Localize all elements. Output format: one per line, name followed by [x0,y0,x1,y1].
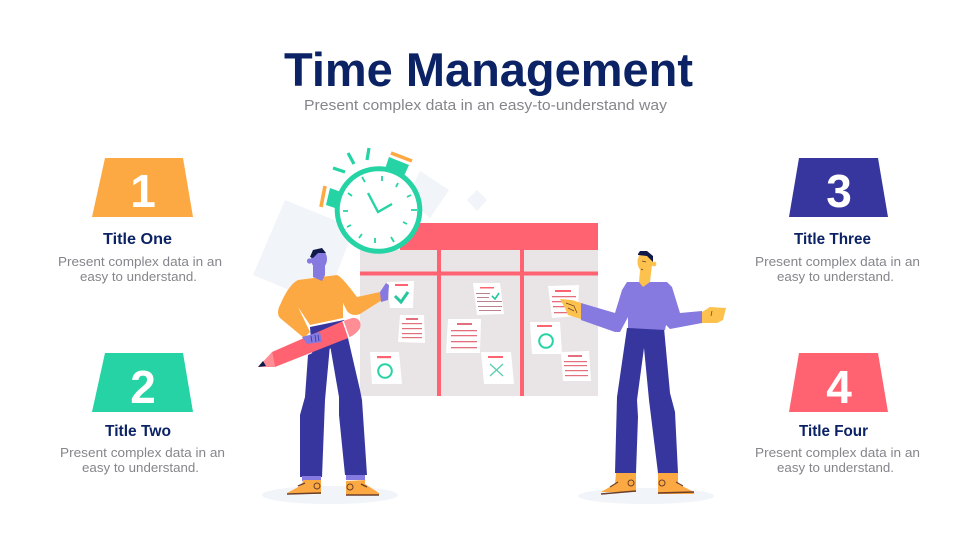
panel: item 3 [755,158,920,284]
illustration: person with pencil [258,248,398,504]
title: Time Management [284,43,693,96]
illustration: background shapes [253,171,487,305]
note: lines right [561,351,591,381]
badge 1 [92,158,193,217]
text: description 2: Present complex data in an [60,445,225,460]
number 3: 3 [826,165,852,217]
number 4: 4 [826,361,852,413]
note: cross [481,352,514,384]
number 1: 1 [130,165,156,217]
head and neck [307,248,327,281]
text: description 1 [58,254,222,284]
sweater [278,275,382,338]
heading: title one: Title One [103,231,172,248]
note: lines [398,315,425,343]
badge 2 [92,353,193,412]
text: description 1: Present complex data in an [58,254,222,269]
note: check [387,281,414,308]
number 2: 2 [130,361,156,413]
heading: title two: Title Two [105,423,171,440]
shoes [287,480,379,495]
trousers [615,328,678,473]
pointing hand [380,283,389,302]
icon: stopwatch [321,148,420,251]
heading: title four: Title Four [799,423,868,440]
text: description 1: easy to understand. [80,269,197,284]
note: circle right [530,322,562,354]
sweater [581,282,702,332]
note: pointed at [548,285,579,318]
illustration: sticky notes [370,281,591,384]
note: lines with check [473,283,504,315]
pencil [258,318,361,367]
heading: title three: Title Three [794,231,871,248]
text: description 2: easy to understand. [82,460,199,475]
text: description 3: Present complex data in an [755,254,920,269]
illustration: presenting person [560,251,726,504]
socks [302,475,365,481]
subtitle: Present complex data in an easy-to-understand way [304,97,668,114]
head and neck [638,251,656,287]
panel: item 2 [60,353,225,475]
illustration: calendar board [360,223,598,396]
panel: item 4 [755,353,920,475]
badge 3 [789,158,888,217]
ground shadow [262,486,398,504]
text: description 3 [755,254,920,284]
text: description 4: Present complex data in an [755,445,920,460]
pointing hand [560,299,581,319]
text: description 2 [60,445,225,475]
badge 4 [789,353,888,412]
ground shadow [578,488,714,504]
trousers [300,320,367,477]
note: circle [370,352,402,384]
note: lines large [446,319,481,353]
text: description 3: easy to understand. [777,269,894,284]
shoes [601,473,694,494]
open hand [702,307,726,323]
text: description 4 [755,445,920,475]
text: description 4: easy to understand. [777,460,894,475]
hand [302,332,322,344]
panel: item 1 [58,158,222,284]
